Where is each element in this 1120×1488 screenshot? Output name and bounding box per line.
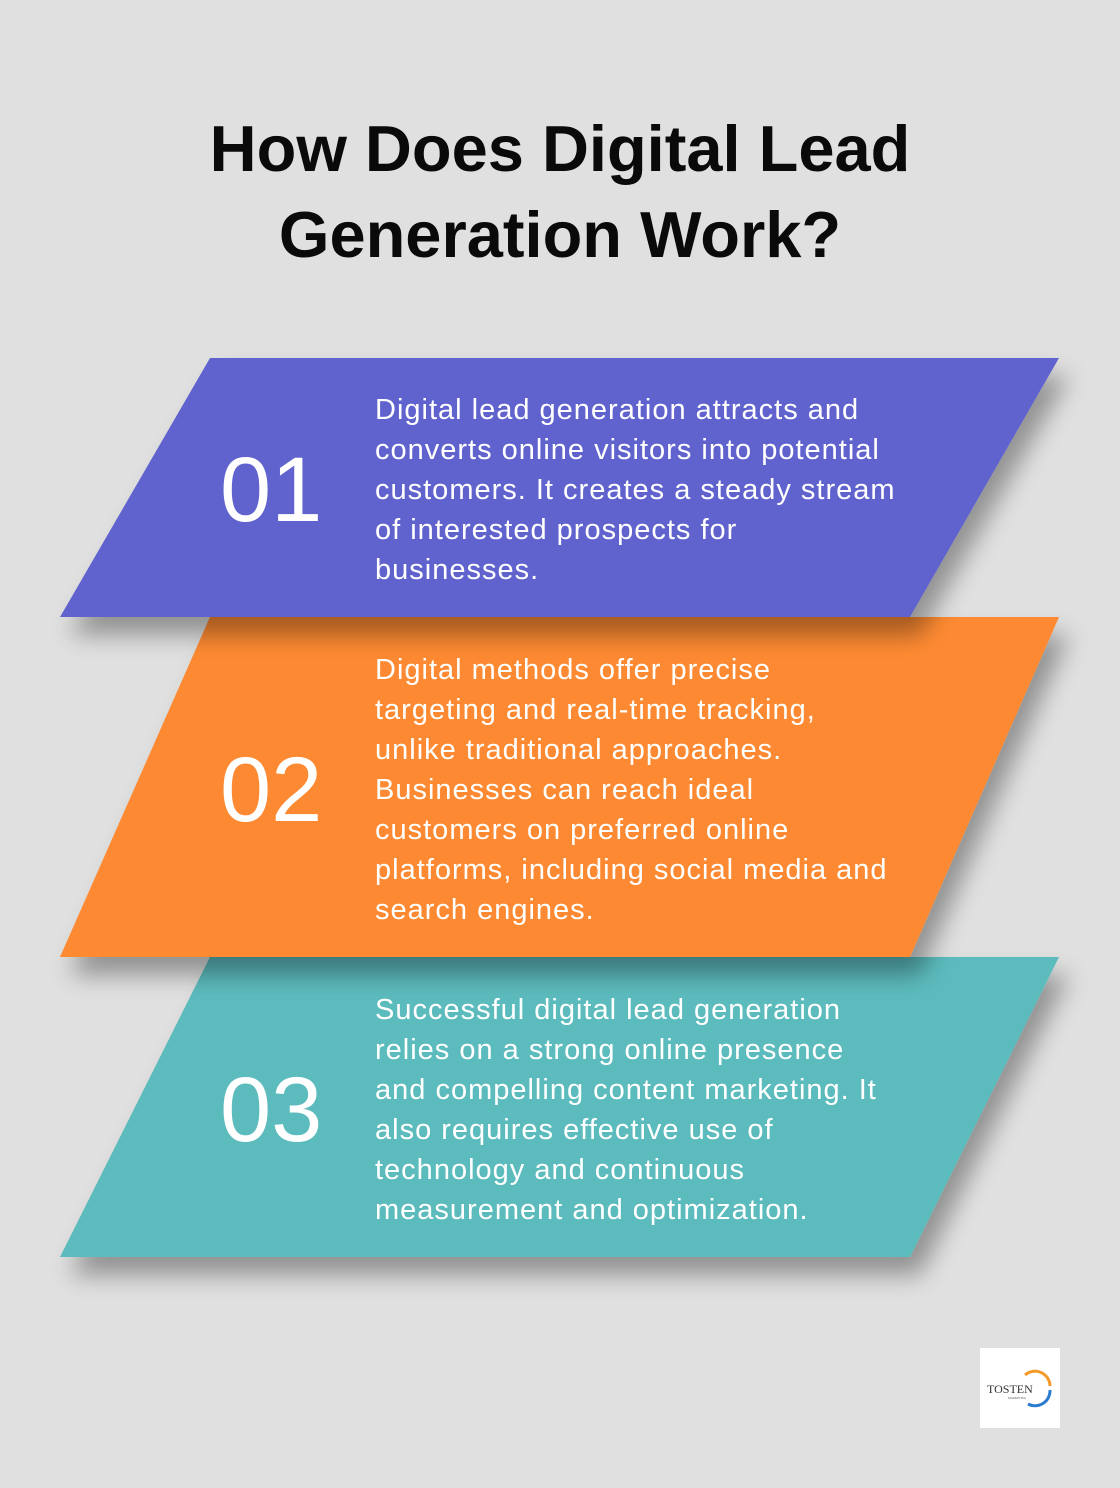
panel 1 text: Digital lead generation attracts and	[375, 394, 859, 426]
panel 2 text: targeting and real-time tracking,	[375, 694, 816, 726]
title: How Does Digital Lead	[210, 112, 910, 185]
panel 3 number: 03	[220, 1059, 322, 1161]
panel 2 number: 02	[220, 739, 322, 841]
panel 3 text: relies on a strong online presence	[375, 1034, 844, 1066]
panel 2 text: platforms, including social media and	[375, 854, 888, 886]
panel 3 shape	[60, 957, 1059, 1257]
panel 2 text: unlike traditional approaches.	[375, 734, 782, 766]
panel 3 text: measurement and optimization.	[375, 1194, 809, 1226]
panel 3 text: technology and continuous	[375, 1154, 745, 1186]
panel 2 text: Businesses can reach ideal	[375, 774, 754, 806]
panel 1 text: customers. It creates a steady stream	[375, 474, 896, 506]
panel 1 shape	[60, 358, 1059, 617]
logo: MARKETING	[1008, 1396, 1027, 1400]
panel 1 text: of interested prospects for	[375, 514, 737, 546]
panel 2 text: Digital methods offer precise	[375, 654, 771, 686]
panel 3 text: and compelling content marketing. It	[375, 1074, 877, 1106]
panel 2 text: search engines.	[375, 894, 595, 926]
panel 3 text: also requires effective use of	[375, 1114, 774, 1146]
panel 1 text	[375, 394, 896, 586]
panel 2 text: customers on preferred online	[375, 814, 789, 846]
panel 2 shape	[60, 617, 1059, 957]
panel 3 text	[375, 994, 877, 1226]
logo: TOSTEN	[987, 1382, 1033, 1396]
panel 1 text: businesses.	[375, 554, 539, 586]
panel 2 text	[375, 654, 888, 926]
panel 3 text: Successful digital lead generation	[375, 994, 841, 1026]
logo	[980, 1348, 1060, 1428]
panel 1 number: 01	[220, 439, 322, 541]
title: Generation Work?	[279, 198, 841, 271]
title	[210, 112, 910, 271]
panel 1 text: converts online visitors into potential	[375, 434, 880, 466]
